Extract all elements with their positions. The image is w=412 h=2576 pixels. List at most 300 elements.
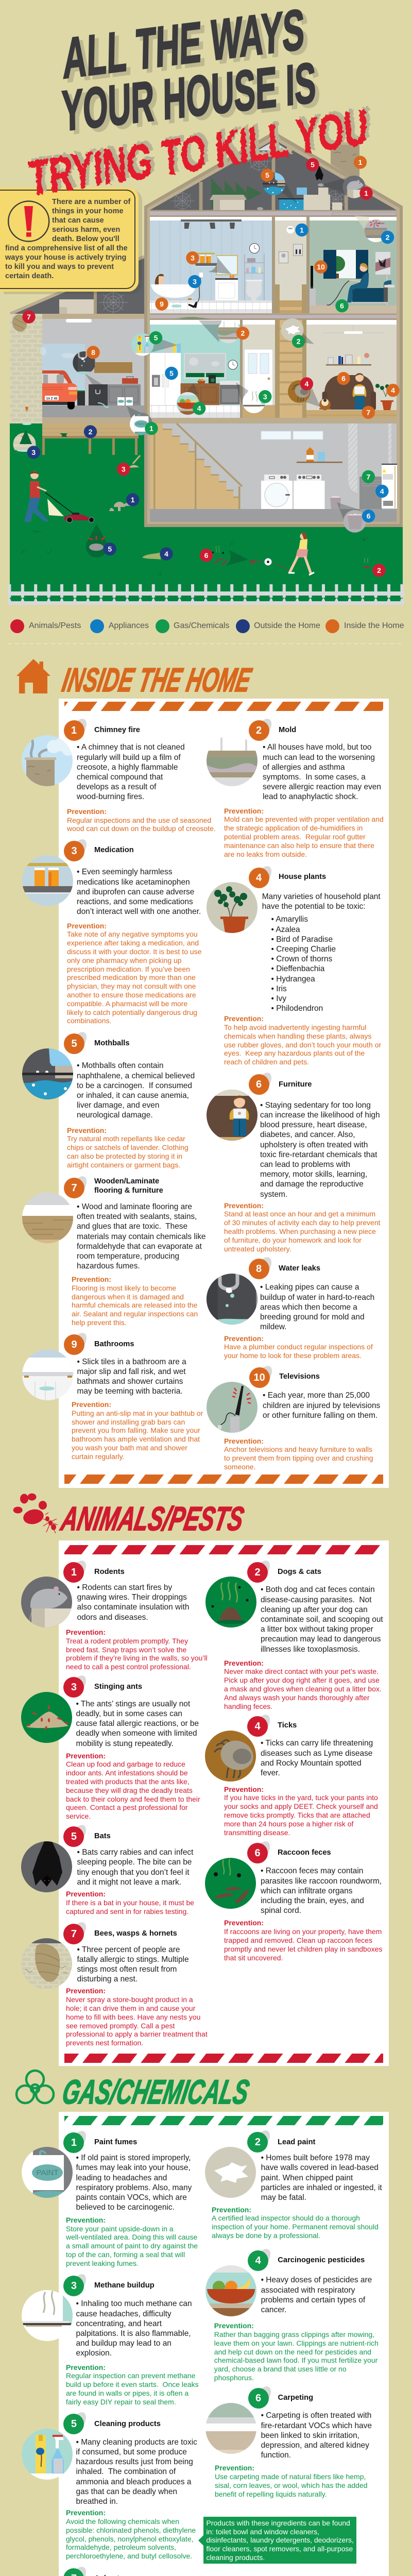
body text: don’t interact well with one another.: [77, 907, 201, 916]
badge red 4: [300, 377, 313, 391]
car: 14 Z 45: [46, 397, 58, 401]
item: mothballs: [22, 1032, 195, 1169]
title: Lead paint: [278, 2138, 315, 2146]
body text: wood-burning fires.: [77, 792, 144, 801]
body text: and damage the reproductive: [260, 1180, 364, 1189]
body text: inhaled. The combination of: [76, 2467, 176, 2476]
title: flooring & furniture: [94, 1187, 163, 1195]
body text: mildew.: [260, 1323, 286, 1331]
body text: • Both dog and cat feces contain: [261, 1585, 375, 1594]
prevention: Mold can be prevented with proper ventilation and: [224, 815, 384, 823]
badge orange 10: 10: [317, 263, 325, 271]
prevention: breed fast. Snap traps won’t solve the: [66, 1646, 186, 1654]
badge red 3: [117, 463, 130, 476]
panel: animals and pests: [59, 1540, 389, 2066]
prevention: maintenance can also help to ensure that there: [224, 841, 374, 850]
prevention: captured and sent in for rabies testing.: [66, 1907, 188, 1916]
laundry shelf items: [297, 447, 342, 463]
body text: • Even seemingly harmless: [77, 868, 173, 876]
prevention: [224, 807, 384, 858]
prevention: [66, 1752, 200, 1821]
legend label: gas: Gas/Chemicals: [174, 621, 229, 630]
prevention: dangerous when it is damaged and: [72, 1293, 184, 1301]
number 3: 3: [71, 1682, 77, 1693]
prevention: can also be protected by storing it in: [67, 1152, 182, 1160]
prevention: only one pharmacy when picking up: [67, 956, 182, 964]
body text: room temperature, producing: [77, 1252, 179, 1261]
prevention: Prevention:: [224, 1659, 264, 1667]
badge orange 4: [386, 384, 400, 397]
body text: tiny enough that you don’t feel it: [77, 1868, 190, 1876]
number 4: 4: [255, 2255, 261, 2266]
garage brick wall: [10, 314, 42, 423]
intro text: that can cause: [52, 216, 104, 225]
prevention: [66, 2216, 198, 2268]
prevention: Prevention:: [66, 2509, 106, 2517]
prevention: [224, 1437, 373, 1471]
body text: have the potential to be toxic:: [262, 902, 366, 911]
callout: products list: [198, 2517, 356, 2564]
prevention: [72, 1400, 203, 1461]
badge blue 5: [165, 367, 178, 380]
prevention: build up before it even starts. Once leaks: [66, 2380, 199, 2388]
body text: • Leaking pipes can cause a: [260, 1283, 359, 1292]
prevention: a small amount of paint to dry against the: [66, 2242, 198, 2250]
title: Bees, wasps & hornets: [94, 1929, 177, 1938]
prevention: glycol, phenols, nonylphenol ethoxylate,: [66, 2535, 194, 2543]
icon: person on sofa: [207, 1090, 258, 1141]
item: methane buildup: [22, 2276, 204, 2407]
body text: to be a carcinogen. If consumed: [77, 1081, 192, 1090]
item: rodents: [21, 1562, 209, 1672]
body text: • Bats carry rabies and can infect: [77, 1848, 193, 1857]
badge orange 2: 2: [241, 329, 245, 337]
item: raccoon feces: [205, 1843, 388, 1962]
body text: paint. When chipped paint: [261, 2174, 353, 2182]
deck: [42, 423, 139, 455]
body text: gas that can be deadly when: [76, 2487, 177, 2496]
prevention: well-ventilated area. Doing this will cause: [66, 2233, 197, 2241]
body text: develops as a result of: [77, 783, 156, 791]
title: [94, 1177, 163, 1195]
icon: potted plant: [207, 882, 258, 933]
prevention: always be done by a professional.: [212, 2231, 320, 2240]
body text: • Heavy doses of pesticides are: [261, 2276, 372, 2284]
badge orange 5: 5: [265, 171, 269, 179]
icon: cleaning bottles: [22, 2429, 72, 2480]
badge red 6: 6: [204, 551, 209, 560]
intro text: to kill you and ways to prevent: [5, 263, 114, 271]
prevention: [67, 807, 216, 833]
item: flooring: [22, 1176, 206, 1327]
body text: [77, 1583, 189, 1622]
number 7: 7: [71, 1182, 77, 1193]
prevention: curtain regularly.: [72, 1452, 124, 1461]
body text: • Rodents can start fires by: [77, 1583, 172, 1592]
number 10: 10: [253, 1372, 265, 1383]
icon: carpet: [205, 2403, 256, 2453]
prevention: Prevention:: [67, 807, 107, 816]
prevention: help prevent this.: [72, 1318, 127, 1327]
prevention: [66, 1987, 208, 2047]
number 4: 4: [254, 1721, 261, 1732]
body text: • Mothballs often contain: [77, 1061, 163, 1070]
body text: breathed in.: [76, 2497, 118, 2506]
badge blue 4: 4: [380, 487, 384, 495]
body text: bathmats and shower curtains: [77, 1377, 183, 1386]
legend label: animals: Animals/Pests: [29, 621, 81, 630]
badge blue 2: [381, 231, 394, 244]
body text: cancer.: [261, 2306, 286, 2314]
icon: bathtub: [22, 1349, 73, 1400]
badge orange 6: 6: [341, 375, 346, 383]
prevention: harmful chemicals are released into the: [72, 1301, 197, 1309]
badge green 7: 7: [366, 472, 370, 481]
item: ticks: [205, 1716, 388, 1838]
prevention: queen. Contact a pest professional for: [66, 1803, 188, 1811]
body text: can increase the likelihood of high: [260, 1111, 380, 1120]
badge green 5: [149, 331, 162, 344]
body text: [77, 1357, 186, 1397]
prevention: [212, 2206, 379, 2240]
body text: • Raccoon feces may contain: [261, 1867, 363, 1875]
badge red 7: [22, 310, 36, 324]
legend label: outside: Outside the Home: [254, 621, 320, 630]
prevention: And always wash your hands thoroughly after: [224, 1693, 370, 1702]
prevention: and help cut down on the need for pesticides and: [214, 2348, 371, 2356]
item: bathrooms: [22, 1334, 207, 1463]
bubble: rodent: [343, 176, 366, 198]
prevention: [214, 2321, 379, 2382]
title: Carcinogenic pesticides: [278, 2256, 365, 2264]
title: Televisions: [279, 1372, 320, 1381]
prevention: reach of children and pets.: [224, 1058, 309, 1066]
body text: [263, 743, 381, 801]
body text: diseases such as Lyme disease: [261, 1749, 372, 1758]
badge blue 5: 5: [169, 369, 174, 377]
number 2: 2: [256, 725, 262, 736]
intro text: serious harm, even: [52, 226, 120, 234]
body text: chemical compound that: [77, 773, 163, 782]
title: Stinging ants: [94, 1683, 142, 1691]
body text: respiratory problems. Also, many: [76, 2183, 192, 2192]
body text: including the brain, eyes, and: [261, 1896, 364, 1905]
body text: • Ticks can carry life threatening: [261, 1739, 373, 1748]
prevention: To help avoid inadvertently ingesting harmful: [224, 1023, 366, 1031]
prevention: [224, 1659, 382, 1710]
plant list: • Azalea: [271, 925, 300, 934]
prevention: shower and installing grab bars can: [72, 1418, 185, 1426]
foyer with door: [240, 320, 275, 418]
badge orange 7: [362, 406, 375, 419]
prevention: Treat a rodent problem promptly. They: [66, 1637, 188, 1645]
prevention: Prevention:: [66, 2363, 106, 2371]
body text: problems and certain types of: [261, 2296, 365, 2304]
callout: products list: Products with these ingredients can be found: [206, 2519, 350, 2527]
icon: paw and ant: [13, 1494, 58, 1533]
badge blue 3: [188, 275, 201, 288]
body text: cleaning up after your dog can: [261, 1605, 368, 1614]
item: carcinogenic pesticides: [205, 2250, 388, 2383]
prevention: Prevention:: [224, 807, 264, 815]
plant list: • Crown of thorns: [271, 955, 332, 963]
body text: fire-retardant VOCs which have: [261, 2421, 372, 2430]
number 3: 3: [71, 2280, 77, 2292]
lint bin: [330, 496, 341, 509]
number 6: 6: [255, 2393, 261, 2404]
title: Dogs & cats: [278, 1568, 321, 1576]
prevention: Prevention:: [66, 1752, 106, 1760]
item: carpeting: [205, 2388, 388, 2501]
body text: • Wood and laminate flooring are: [77, 1202, 192, 1211]
attic storage boxes and bin: [257, 183, 342, 210]
living room: [306, 320, 397, 418]
icon: tick: [205, 1731, 255, 1782]
body text: spinal cord.: [261, 1906, 301, 1915]
title: Rodents: [94, 1568, 125, 1576]
item: house plants: [207, 866, 381, 1066]
bubble: cleaning products: [131, 333, 153, 356]
badge red 1: [359, 187, 373, 200]
prevention: prevent you from falling. Make sure your: [72, 1426, 200, 1434]
body text: sleeping people. The bite can be: [77, 1858, 192, 1867]
item: asbestos: [22, 2568, 382, 2576]
body text: children are injured by televisions: [263, 1401, 380, 1410]
prevention: Flooring is most likely to become: [72, 1284, 176, 1292]
body text: [76, 2153, 192, 2212]
badge red 2: [372, 564, 386, 577]
badge blue 6: 6: [367, 512, 371, 520]
icon: fruit bowl: [205, 2265, 256, 2316]
body text: reactions, and some medications: [77, 897, 193, 906]
number 1: 1: [71, 725, 77, 736]
body text: illnesses like toxoplasmosis.: [261, 1645, 360, 1654]
prevention: [67, 1126, 188, 1169]
callout: products list: cleaning products.: [206, 2553, 265, 2562]
body text: buildup of water in hard-to-reach: [260, 1293, 374, 1302]
body text: • All houses have mold, but too: [263, 743, 371, 752]
number 1: 1: [71, 2137, 77, 2148]
badge red 1: 1: [364, 189, 368, 197]
plant list: • Philodendron: [271, 1004, 323, 1013]
body text: or inhaled, it can cause anemia,: [77, 1091, 189, 1100]
body text: • Inhaling too much methane can: [76, 2299, 192, 2308]
badge red 2: 2: [377, 566, 381, 574]
badge navy 5: 5: [108, 545, 112, 553]
badge blue 6: [362, 510, 375, 522]
badge orange 2: [236, 327, 249, 340]
prevention: eyes. Keep any hazardous plants out of the: [224, 1049, 365, 1057]
body text: leading to headaches and: [76, 2174, 167, 2182]
item: lead paint: [205, 2132, 389, 2241]
prevention: Prevention:: [212, 2206, 251, 2214]
prevention: Anchor televisions and heavy furniture to walls: [224, 1445, 372, 1453]
prevention: trapped and removed. Clean up raccoon feces: [224, 1936, 372, 1944]
raccoon feces bubble and wedge: [208, 545, 248, 568]
prevention: problem if they’re living in the walls, so you’ll: [66, 1654, 208, 1662]
badge orange 6: [337, 372, 350, 385]
bubble: pesticides: [177, 392, 199, 415]
number 6: 6: [256, 1079, 262, 1090]
prevention: more than 24 hours pose a higher risk of: [224, 1820, 353, 1828]
bather in tub: [151, 274, 196, 308]
body text: blood pressure, heart disease,: [260, 1121, 367, 1129]
body text: gnawing wires. Their droppings: [77, 1593, 187, 1602]
prevention: Prevention:: [66, 1628, 106, 1636]
prevention: airtight containers or garment bags.: [67, 1161, 180, 1169]
prevention: likely to catch potentially dangerous drug: [67, 1008, 197, 1016]
prevention: Store your paint upside-down in a: [66, 2225, 174, 2233]
plant list: • Dieffenbachia: [271, 964, 324, 973]
prevention: treated with products that the ants like,: [66, 1777, 190, 1786]
body text: system.: [260, 1190, 287, 1199]
badge orange 4: 4: [391, 386, 395, 395]
prevention: your home to look for these problem areas.: [224, 1351, 362, 1360]
kitchen: [150, 320, 240, 418]
prevention: remove ticks promptly. Ticks that are attached: [224, 1811, 370, 1819]
mushrooms: [109, 502, 131, 511]
callout: products list: floor cleaners, spot removers, and all-purpose: [206, 2545, 353, 2553]
badge green 5: 5: [154, 334, 158, 342]
body text: memory, motor skills, learning,: [260, 1170, 367, 1179]
body text: [262, 892, 381, 911]
sprinkler by wall: [20, 406, 32, 444]
badge red 5: 5: [311, 161, 315, 169]
body text: [261, 2411, 372, 2460]
icon: ant hill: [21, 1692, 72, 1742]
badge red 3: 3: [122, 465, 126, 473]
bat: [315, 166, 323, 180]
title: Cleaning products: [94, 2420, 161, 2428]
body text: • A chimney that is not cleaned: [77, 743, 185, 752]
prevention: to prevent them from tipping over and crushing: [224, 1454, 373, 1462]
person on sofa with laptop: [353, 373, 366, 410]
body text: and glues that are toxic. These: [77, 1222, 187, 1231]
prevention: are no leaks from outside.: [224, 850, 307, 858]
body text: upholstery is often treated with: [260, 1141, 368, 1149]
body text: if consumed, but some produce: [76, 2448, 187, 2456]
body text: fumes may leak into your house,: [76, 2163, 191, 2172]
body text: parasites like raccoon roundworm,: [261, 1877, 382, 1886]
title: Carpeting: [278, 2394, 313, 2402]
prevention: sisal, corn leaves, or wool, which has the added: [215, 2481, 368, 2489]
body text: [261, 2153, 382, 2202]
item: water leaks: [207, 1257, 374, 1360]
body text: [77, 868, 201, 916]
icon: raccoon feces: [205, 1858, 255, 1908]
prevention: compatible. A pharmacist will be more: [67, 999, 187, 1008]
car: [42, 370, 77, 410]
badge green 6: 6: [340, 302, 344, 310]
bubble: wet grass: [13, 433, 36, 455]
person with game controller: [317, 263, 369, 306]
prevention: If there is a bat in your house, it must be: [66, 1899, 194, 1907]
body text: neurological damage.: [77, 1111, 153, 1120]
bubble: mothballs: [263, 173, 285, 195]
badge navy 2: [84, 425, 97, 438]
heading: animals pests: [0, 1489, 288, 1540]
body text: • Homes built before 1978 may: [261, 2154, 370, 2162]
badge red 7: 7: [27, 313, 31, 321]
badge orange 8: 8: [91, 348, 95, 357]
prevention: Prevention:: [66, 2216, 106, 2224]
prevention: Pick up after your dog right after it goes, and use: [224, 1676, 380, 1684]
number 5: 5: [71, 2418, 77, 2430]
title: [28, 0, 371, 207]
icon: biohazard: [16, 2071, 54, 2103]
prevention: Prevention:: [215, 2464, 254, 2472]
prevention: indoor ants. Ant infestations should be: [66, 1769, 188, 1777]
body text: regularly will build up a film of: [77, 753, 181, 762]
prevention: home to fill with bees. Have any nests you: [66, 2013, 200, 2021]
prevention: Try natural moth repellants like cedar: [67, 1134, 185, 1143]
picket fence: [8, 584, 404, 605]
body text: cause fatal allergic reactions, or be: [76, 1719, 199, 1728]
body text: [77, 1945, 189, 1985]
title: Wooden/Laminate: [94, 1177, 159, 1185]
body text: also contaminate insulation with: [77, 1603, 189, 1612]
prevention: chemicals when handling these plants, always: [224, 1032, 371, 1040]
grass tufts: [21, 531, 368, 576]
prevention: use rubber gloves, and don’t touch your mouth or: [224, 1041, 381, 1049]
prevention: see removed promptly. Call a pest: [66, 2022, 175, 2030]
body text: hazardous fumes.: [77, 1262, 140, 1270]
callout: products list: in: toilet bowl and window cleaners,: [206, 2528, 319, 2536]
body text: and it might not leave a mark.: [77, 1878, 181, 1887]
panel: gas and chemicals: [59, 2112, 389, 2576]
dog waste: [248, 558, 371, 568]
wasp nest: [10, 313, 29, 333]
bubble: electrical: [365, 219, 387, 242]
house cutaway illustration: [8, 134, 404, 605]
soccer ball: [255, 558, 289, 571]
title: Bathrooms: [94, 1340, 134, 1348]
badge navy 4: 4: [164, 550, 168, 558]
legend dot: outside: [236, 619, 249, 633]
prevention: are found in walls or pipes, it is often a: [66, 2389, 188, 2397]
body text: liver damage, and even: [77, 1101, 159, 1110]
prevention: Putting an anti-slip mat in your bathtub or: [72, 1409, 203, 1417]
badge green 7: [362, 470, 375, 483]
prevention: prescribed medication by more than one: [67, 973, 196, 981]
body text: and Rocky Mountain spotted: [261, 1759, 362, 1768]
prevention: prescription medication. If you’ve been: [67, 965, 190, 973]
prevention: possible: chlorinated phenols, diethylene: [66, 2526, 196, 2534]
badge orange 9: 9: [160, 300, 164, 308]
bubble: paint: [130, 413, 152, 435]
bubble: methane: [243, 391, 265, 413]
legend dot: gas: [156, 619, 169, 633]
legend dot: animals: [10, 619, 24, 633]
title: Mold: [279, 726, 296, 734]
title: Ticks: [278, 1721, 297, 1730]
prevention: Prevention:: [67, 922, 107, 930]
prevention: Prevention:: [224, 1437, 264, 1445]
section: animals and pests: [0, 1489, 412, 2066]
badge green 4: [193, 402, 205, 415]
prevention: discuss it with your doctor. It is best to use: [67, 947, 201, 956]
body text: stings most often result from: [77, 1965, 177, 1974]
body text: associated with respiratory: [261, 2286, 355, 2295]
badge orange 8: [87, 346, 100, 359]
icon: wood floor: [22, 1192, 73, 1243]
badge green 3: 3: [263, 393, 267, 401]
attic christmas tree in box: [210, 178, 262, 210]
body text: [76, 1699, 199, 1749]
icon: chipped paint: [205, 2147, 256, 2198]
body text: creosote, a highly flammable: [77, 763, 178, 772]
number 4: 4: [256, 872, 262, 883]
